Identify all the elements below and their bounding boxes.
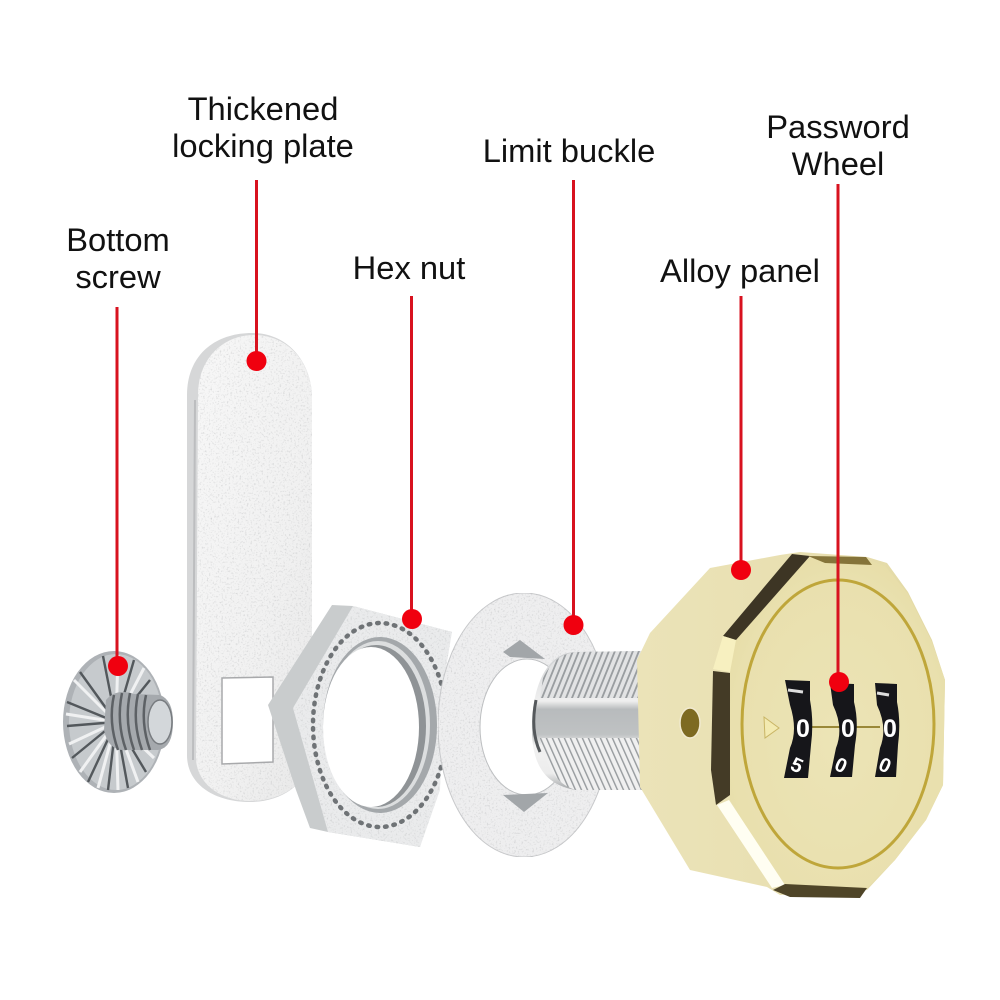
square hole in plate <box>222 677 273 764</box>
label: Bottom screw <box>66 221 170 676</box>
bottom screw <box>63 651 173 793</box>
label: Limit buckle: Limit buckle <box>483 132 655 169</box>
label: Password Wheel: Wheel <box>792 145 884 182</box>
label: Alloy panel <box>660 252 820 580</box>
password wheel middle: 0 <box>831 754 850 778</box>
label: Alloy panel: Alloy panel <box>660 252 820 289</box>
password wheel right: 0 <box>875 754 894 778</box>
side pin hole <box>680 708 700 738</box>
password wheel left: 0 <box>796 715 810 743</box>
front face <box>730 558 945 890</box>
washer centre hole <box>480 659 574 795</box>
label: Password Wheel: Password <box>766 108 910 145</box>
locking plate <box>187 333 312 802</box>
label: Limit buckle <box>483 132 655 635</box>
password wheel middle <box>830 683 857 778</box>
label: Thickened locking plate <box>172 90 354 371</box>
password wheel left <box>784 680 812 778</box>
axle <box>812 726 880 728</box>
label: Hex nut: Hex nut <box>353 249 465 286</box>
nut inner thread <box>323 637 437 813</box>
label: Bottom screw: screw <box>75 258 161 295</box>
label: Hex nut <box>353 249 465 629</box>
password wheel right <box>875 683 899 778</box>
label: Thickened locking plate: Thickened <box>188 90 338 127</box>
nut rivet dots <box>313 623 447 827</box>
password wheel right: 0 <box>883 715 897 743</box>
label: Bottom screw: Bottom <box>66 221 170 258</box>
screw thread <box>104 692 173 750</box>
washer tabs <box>503 640 545 659</box>
password wheel middle: 0 <box>841 715 855 743</box>
label: Thickened locking plate: locking plate <box>172 127 354 164</box>
alloy panel lock body <box>637 552 945 898</box>
threaded bolt <box>532 651 645 790</box>
bevel <box>723 554 810 640</box>
label: Password Wheel <box>766 108 910 692</box>
gold ring <box>742 580 934 868</box>
password wheel left: 5 <box>787 754 806 778</box>
indicator triangle <box>764 717 779 738</box>
hex nut <box>268 605 452 847</box>
body side <box>637 552 945 895</box>
limit buckle washer <box>438 593 610 857</box>
